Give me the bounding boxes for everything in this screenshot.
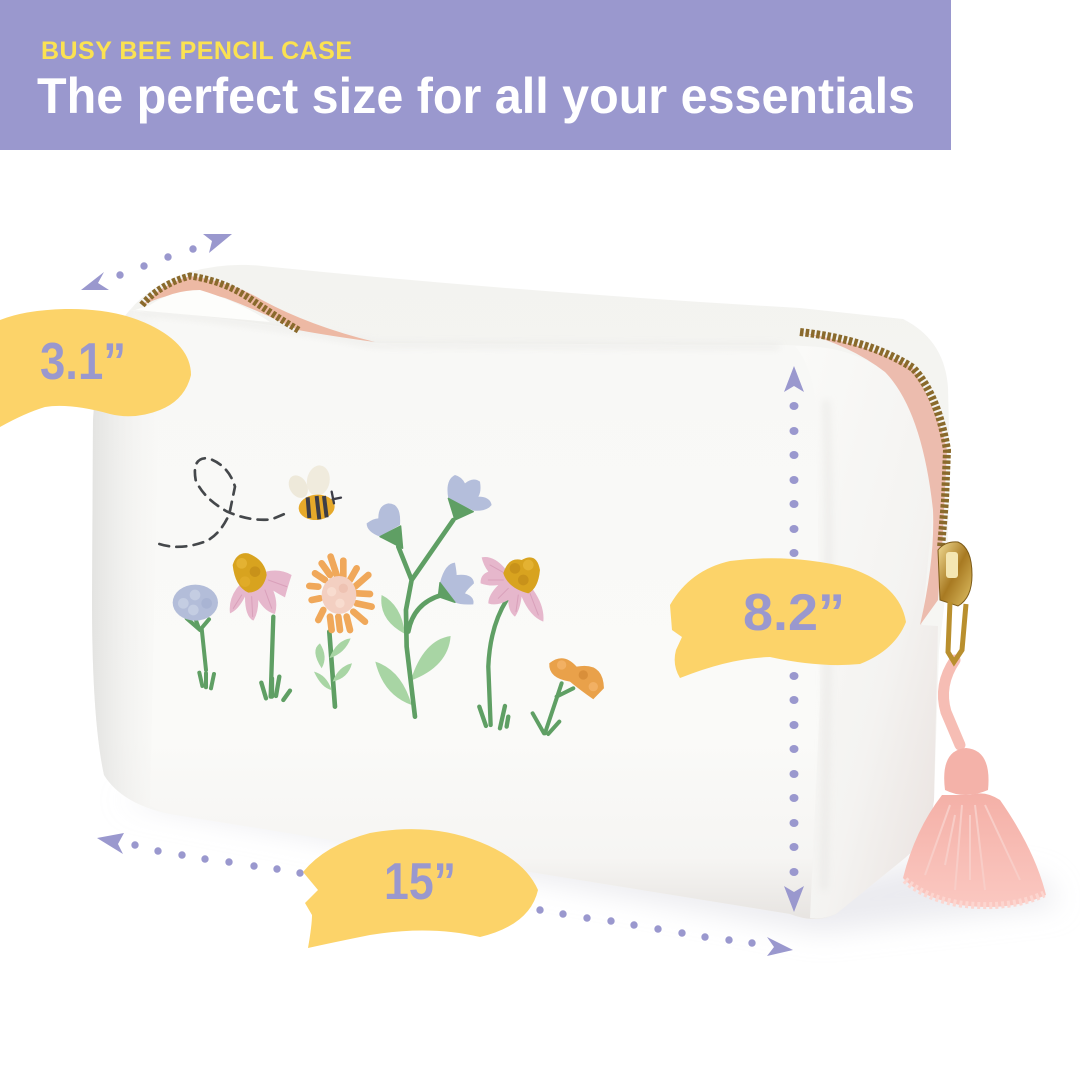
callout: depth 3.1: 3.1” bbox=[40, 333, 126, 391]
side panel bbox=[795, 346, 938, 918]
callout: depth 3.1 bbox=[0, 309, 191, 427]
eyebrow heading: BUSY BEE PENCIL CASE bbox=[41, 37, 352, 65]
bee bbox=[285, 464, 341, 522]
right zipper tape bbox=[800, 332, 947, 625]
left zipper tape bbox=[142, 276, 375, 342]
case silhouette bbox=[92, 265, 950, 919]
flap seam shadow bbox=[140, 312, 780, 347]
pencil case illustration bbox=[92, 265, 950, 919]
callout: height 8.2: 8.2” bbox=[743, 584, 845, 642]
flower 4: tall blue flowers bbox=[367, 475, 492, 717]
title: The perfect size for all your essentials bbox=[37, 68, 915, 124]
left edge shading bbox=[92, 310, 170, 814]
arrow: width dimension bbox=[97, 833, 793, 956]
tassel cord bbox=[943, 660, 960, 745]
right zipper teeth bbox=[800, 332, 947, 548]
tassel head bbox=[944, 748, 989, 795]
zipper pull and tassel bbox=[903, 542, 1046, 907]
tassel fringe bbox=[925, 805, 1020, 890]
flower 3: orange daisy bbox=[309, 557, 372, 707]
tassel skirt bbox=[903, 793, 1046, 907]
flower 5: pink coneflower bbox=[479, 557, 544, 728]
arrow: height dimension bbox=[784, 366, 804, 912]
left zipper inner lining bbox=[135, 290, 270, 322]
callout: height 8.2 bbox=[670, 558, 906, 678]
embroidery bbox=[159, 458, 604, 734]
flower 2: pink coneflower bbox=[230, 553, 292, 700]
floor shadow under the case bbox=[120, 790, 1060, 932]
callout: width 15: 15” bbox=[384, 853, 456, 911]
left zipper teeth bbox=[142, 276, 300, 331]
arrow: depth dimension bbox=[81, 234, 232, 290]
flower 1: blue cluster bbox=[173, 585, 218, 688]
zipper pull bbox=[938, 542, 972, 662]
bee flight path bbox=[159, 458, 290, 547]
tassel fuzzy hem bbox=[905, 880, 1044, 906]
panel: header banner bbox=[0, 0, 951, 150]
corner seam shadow bbox=[824, 400, 829, 890]
lower body bbox=[92, 310, 938, 919]
callout: width 15 bbox=[303, 829, 538, 948]
flower 6: orange cluster bbox=[533, 658, 604, 734]
